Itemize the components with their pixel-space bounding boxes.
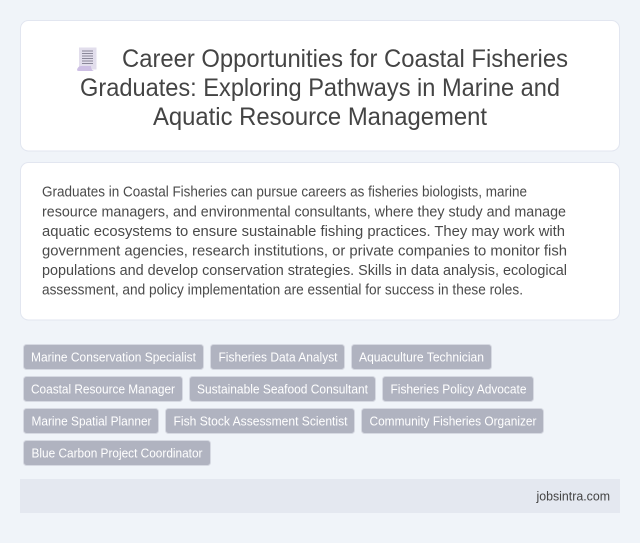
tag: Blue Carbon Project Coordinator <box>32 446 202 460</box>
tags: career roles <box>24 344 544 466</box>
heading: Graduates: Exploring Pathways in Marine and <box>80 74 560 102</box>
tag: Aquaculture Technician <box>359 350 484 364</box>
tag <box>382 376 534 402</box>
heading <box>80 45 568 131</box>
heading: Aquatic Resource Management <box>153 103 487 131</box>
tag <box>24 344 204 370</box>
tag: Marine Conservation Specialist <box>31 350 196 364</box>
tag <box>24 376 182 402</box>
tag <box>24 408 158 434</box>
heading: Career Opportunities for Coastal Fisheries <box>122 45 568 73</box>
text block: description: aquatic ecosystems to ensure sustainable fishing practices. They may work with <box>42 224 565 240</box>
tag <box>352 344 492 370</box>
text block: description: resource managers, and environmental consultants, where they study and manage <box>42 204 566 220</box>
text block: description: government agencies, research institutions, or private companies to monitor fish <box>42 244 567 260</box>
text block: description: populations and develop conservation strategies. Skills in data analysis, ecological <box>42 263 567 279</box>
tag: Marine Spatial Planner <box>32 414 152 428</box>
text block: description <box>42 184 567 298</box>
tag <box>190 376 376 402</box>
panel: title card <box>20 20 620 151</box>
tag <box>210 344 344 370</box>
tag <box>24 440 210 466</box>
tag <box>362 408 544 434</box>
text block: description: Graduates in Coastal Fisheries can pursue careers as fisheries biologists, marine <box>42 184 527 200</box>
tag <box>166 408 354 434</box>
footer source text: jobsintra.com <box>536 490 610 504</box>
panel: description <box>20 162 620 320</box>
footer bar <box>20 479 620 513</box>
text block: description: assessment, and policy implementation are essential for success in these roles. <box>42 282 523 298</box>
tag: Fisheries Policy Advocate <box>390 382 526 396</box>
tag: Community Fisheries Organizer <box>370 414 536 428</box>
tag: Coastal Resource Manager <box>31 382 175 396</box>
tag: Fisheries Data Analyst <box>218 350 338 364</box>
tag: Sustainable Seafood Consultant <box>197 382 368 396</box>
icon: paper scroll <box>77 48 96 71</box>
tag: Fish Stock Assessment Scientist <box>174 414 348 428</box>
